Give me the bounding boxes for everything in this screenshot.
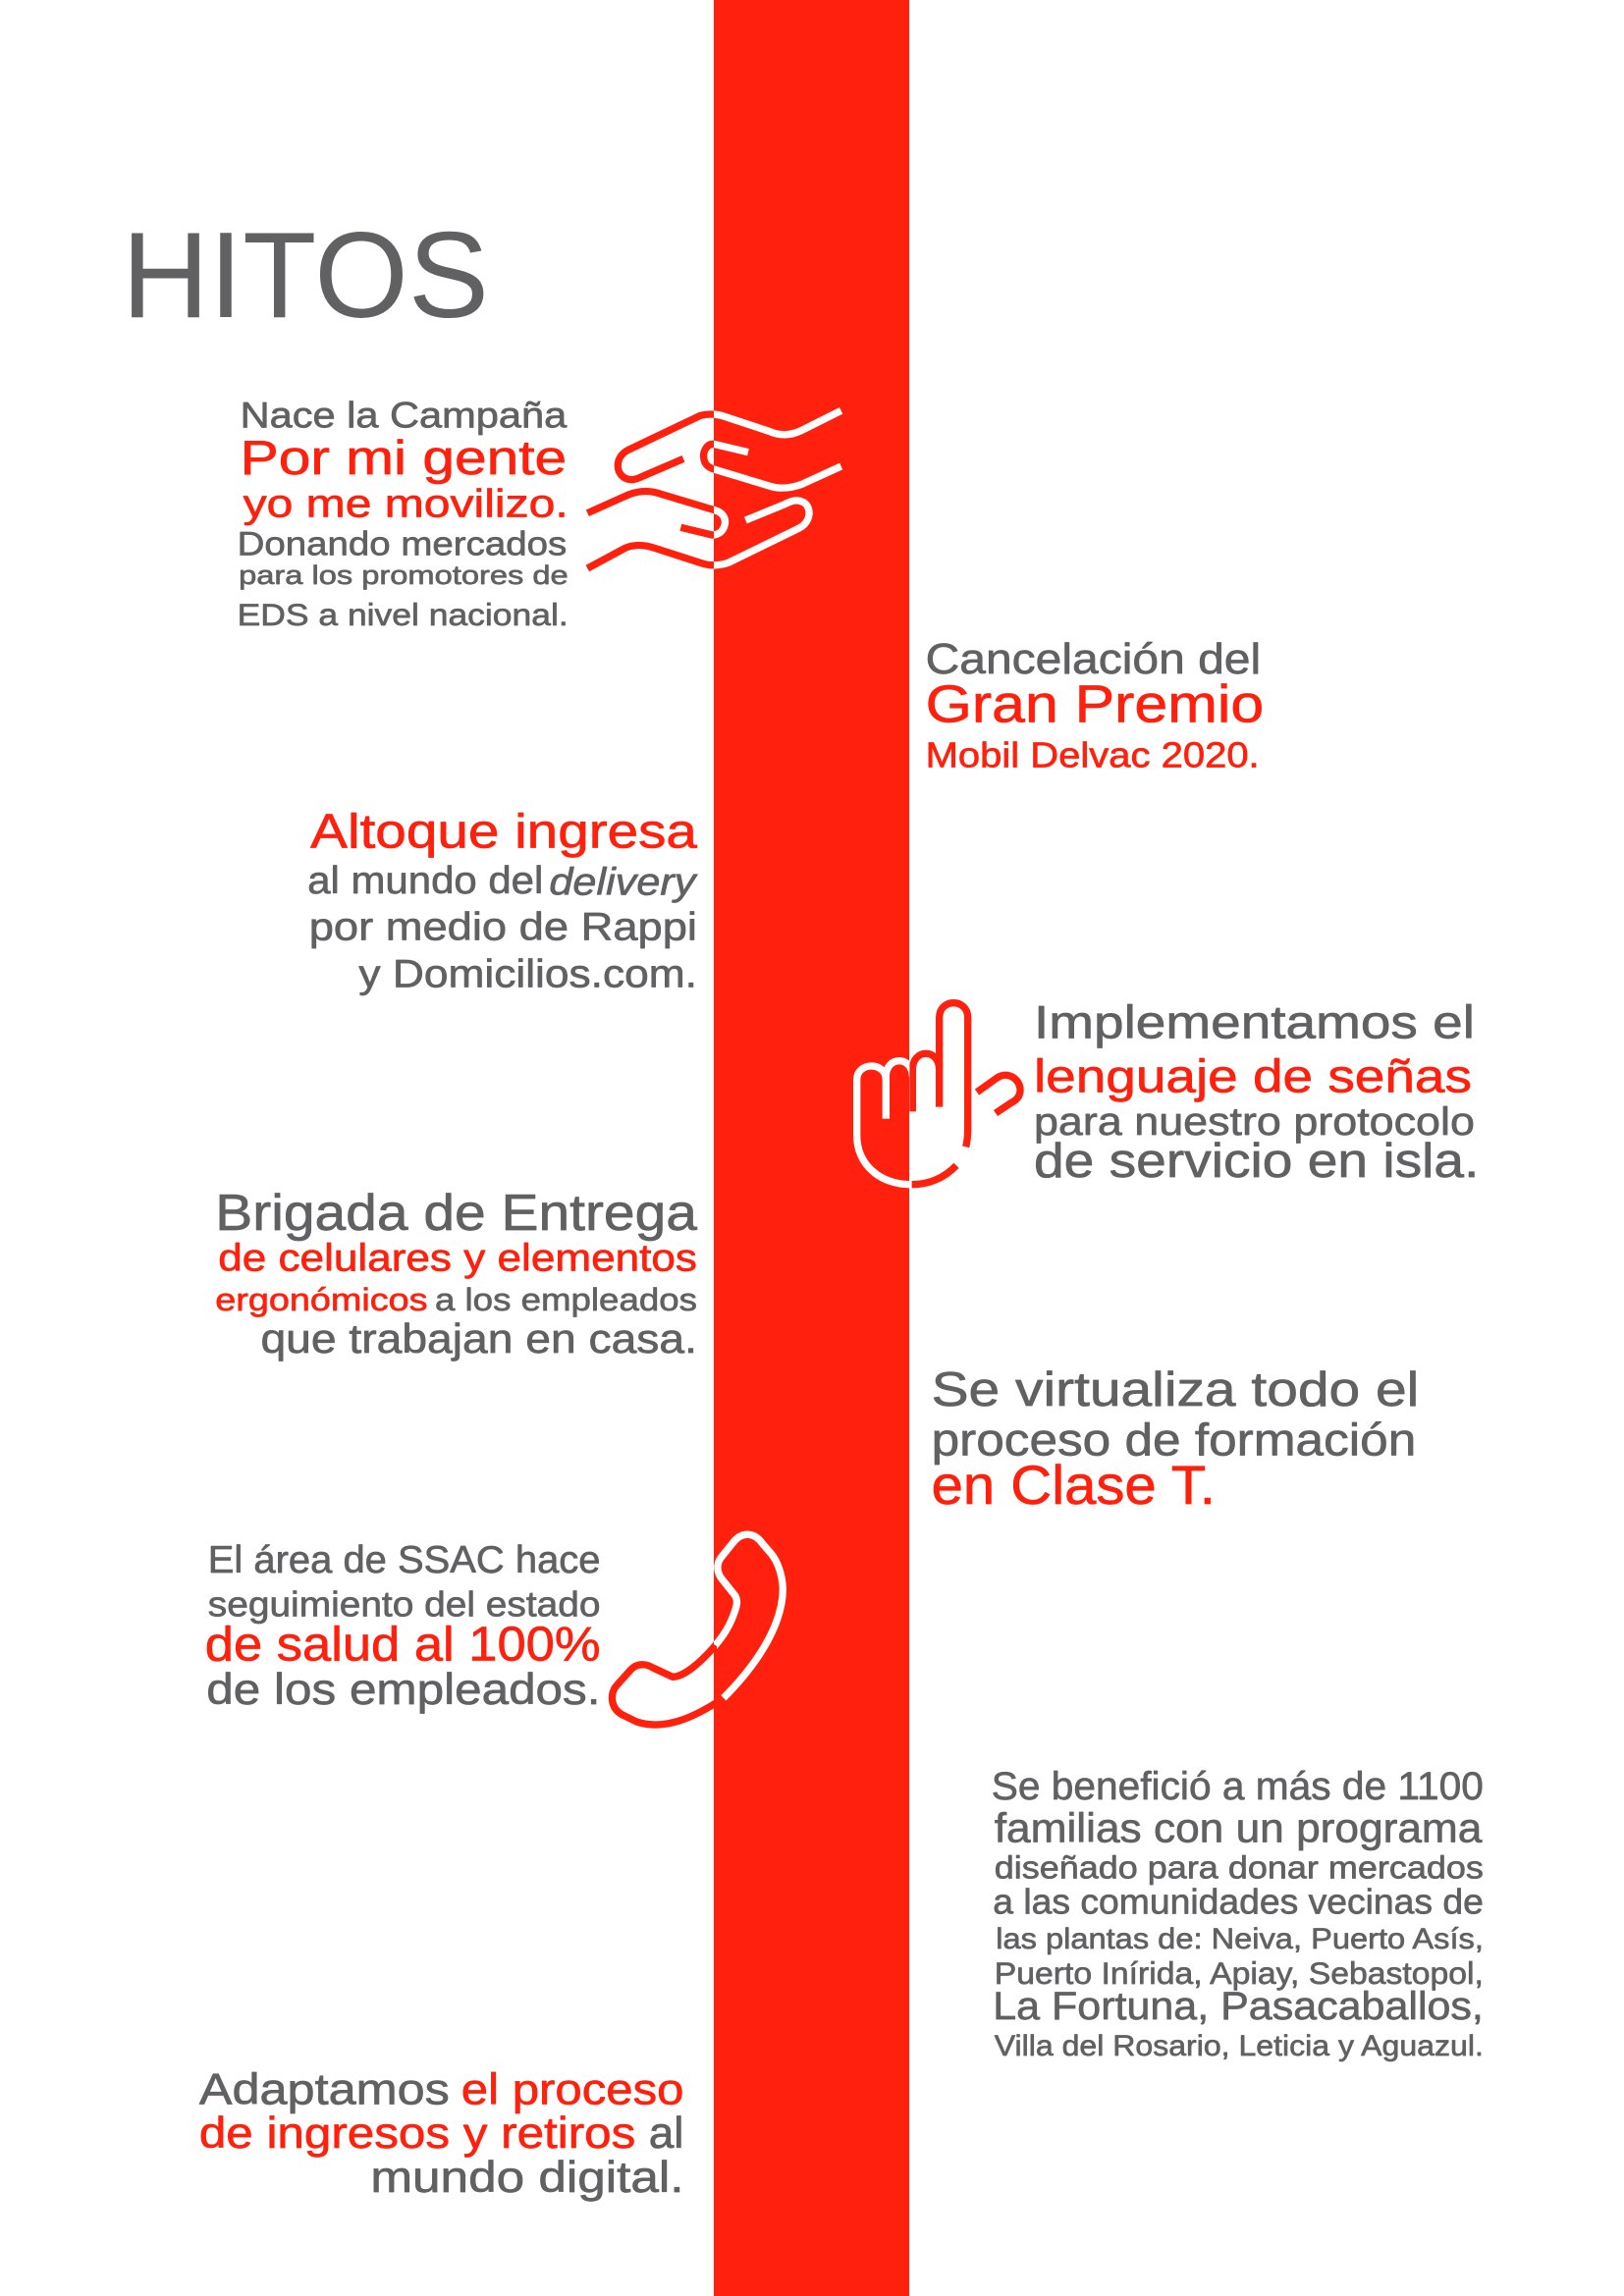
text block: campaign Por mi gente: Por mi gente [241,431,567,485]
text block: SSAC [205,1539,601,1714]
text block: lenguaje de señas: para nuestro protocolo [1034,1099,1475,1144]
icon: telephone [612,1534,783,1725]
text block: Gran Premio [926,636,1264,775]
text block: campaign Por mi gente: EDS a nivel nacional. [238,598,568,632]
text block: lenguaje de señas: de servicio en isla. [1034,1134,1479,1188]
text block: SSAC: El área de SSAC hace [208,1539,601,1581]
text block: Clase T: Se virtualiza todo el [932,1362,1419,1416]
text block: Altoque: al mundo del [307,860,543,902]
text block: Clase T: en Clase T. [932,1455,1216,1516]
text block: ingresos y retiros: mundo digital. [370,2153,684,2202]
title: HITOS [122,208,489,344]
text block: campaign Por mi gente: yo me movilizo. [244,481,568,525]
text block: ingresos y retiros: el proceso [461,2064,684,2113]
text block: Gran Premio: Cancelación del [926,636,1261,683]
text block: campaign Por mi gente: Nace la Campaña [241,395,568,436]
text block: familias beneficiadas [992,1764,1484,2062]
text block: Brigada de Entrega: Brigada de Entrega [215,1185,698,1242]
icon: hands [587,410,841,568]
text block: familias beneficiadas: La Fortuna, Pasacaballos, [993,1984,1484,2028]
text block: ingresos y retiros [199,2064,684,2202]
icon: sign-language hand [857,1003,1020,1185]
text block: Brigada de Entrega: ergonómicos [215,1281,428,1317]
text block: Gran Premio: Mobil Delvac 2020. [926,736,1260,775]
text block: ingresos y retiros: de ingresos y retiros [199,2109,635,2158]
text block: ingresos y retiros: al [649,2109,684,2158]
text block: familias beneficiadas: Puerto Inírida, Apiay, Sebastopol, [995,1956,1484,1991]
text block: Brigada de Entrega [215,1185,698,1362]
text block: ingresos y retiros: Adaptamos [199,2064,450,2113]
text block: familias beneficiadas: las plantas de: Neiva, Puerto Asís, [996,1923,1484,1955]
text block: SSAC: seguimiento del estado [208,1585,601,1625]
central red band [714,0,909,2296]
text block: Gran Premio: Gran Premio [926,674,1264,733]
text block: lenguaje de señas: lenguaje de señas [1034,1051,1472,1103]
text block: familias beneficiadas: diseñado para donar mercados [995,1849,1484,1886]
text block: SSAC: de salud al 100% [205,1617,601,1671]
text block: SSAC: de los empleados. [206,1665,601,1714]
text block: Altoque: Altoque ingresa [310,805,698,859]
text block: Altoque: delivery [549,861,698,903]
text block: campaign Por mi gente [238,395,568,632]
text block: Altoque: y Domicilios.com. [358,951,697,995]
text block: Clase T [932,1362,1419,1516]
text block: Brigada de Entrega: de celulares y elementos [218,1238,697,1280]
text block: familias beneficiadas: Villa del Rosario, Leticia y Aguazul. [995,2030,1484,2062]
text block: lenguaje de señas [1034,996,1479,1188]
text block: Altoque [307,805,698,995]
text block: campaign Por mi gente: para los promotores de [239,561,568,590]
text block: Clase T: proceso de formación [932,1415,1416,1466]
text block: familias beneficiadas: Se benefició a más de 1100 [992,1764,1484,1808]
text block: lenguaje de señas: Implementamos el [1034,996,1475,1048]
text block: Altoque: por medio de Rappi [309,905,697,949]
text block: campaign Por mi gente: Donando mercados [238,525,567,562]
text block: Brigada de Entrega: a los empleados [435,1281,697,1317]
text block: familias beneficiadas: familias con un programa [995,1804,1483,1850]
text block: Brigada de Entrega: que trabajan en casa. [260,1315,697,1362]
text block: familias beneficiadas: a las comunidades vecinas de [993,1882,1484,1921]
